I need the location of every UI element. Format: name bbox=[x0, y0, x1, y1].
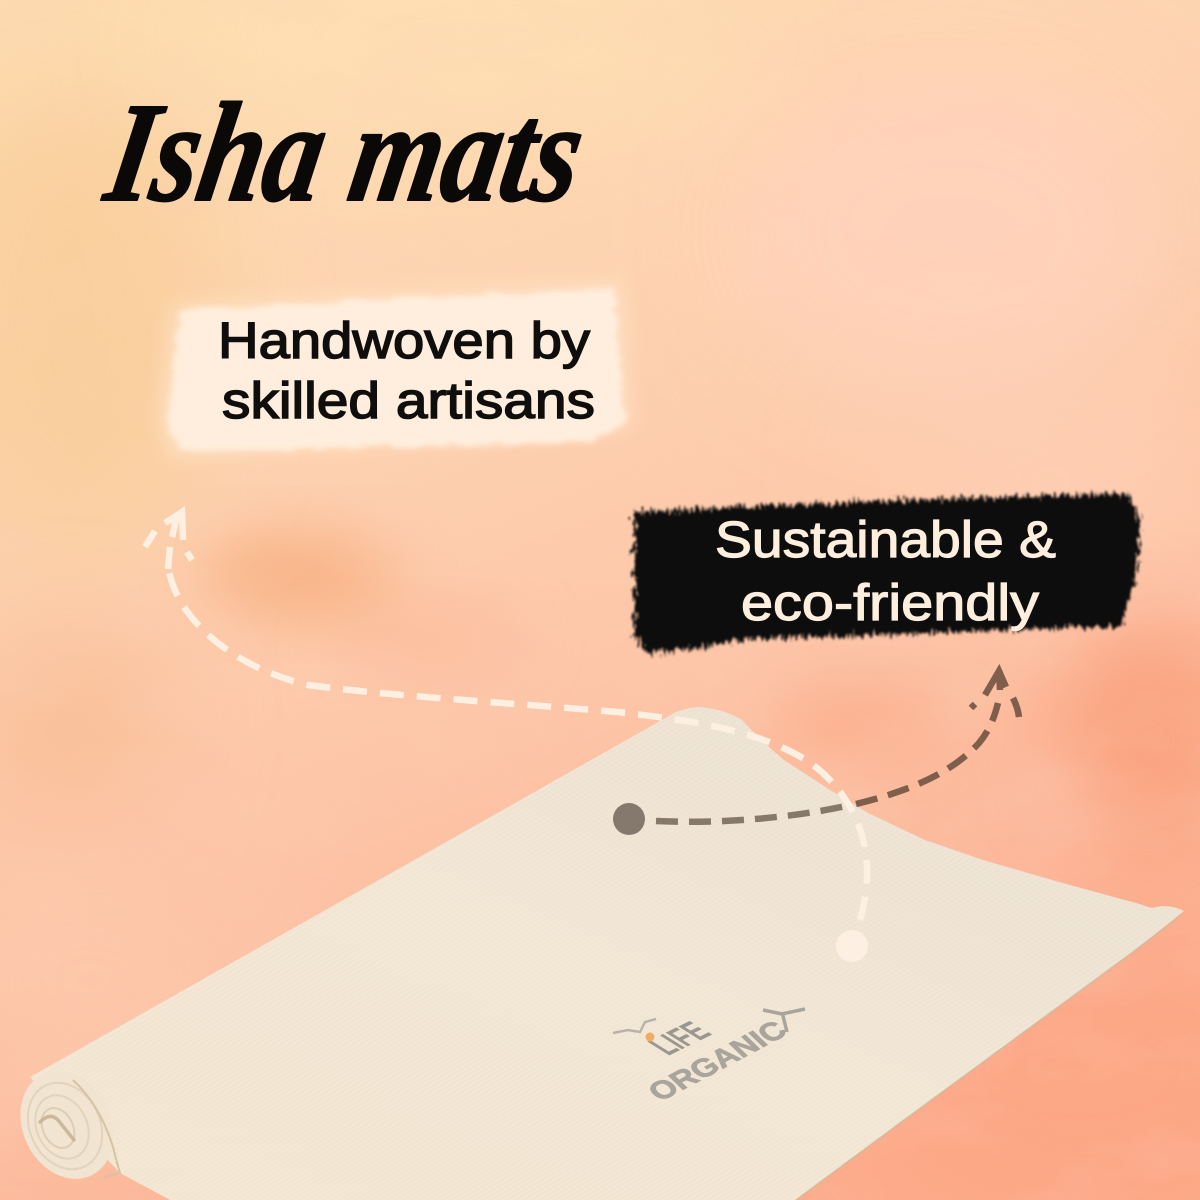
label: handwoven by skilled artisans bbox=[158, 280, 632, 458]
arrow head bbox=[971, 671, 1019, 717]
mat weave texture bbox=[30, 707, 1184, 1200]
title: Isha mats bbox=[95, 73, 595, 231]
mat right edge line bbox=[796, 916, 1180, 1200]
title: Isha mats: Isha bbox=[95, 73, 338, 231]
dashed curve bbox=[168, 565, 867, 920]
brush patch: cream bbox=[158, 280, 632, 458]
handwoven text: skilled artisans bbox=[222, 372, 595, 429]
arrow head bbox=[145, 512, 192, 560]
logo: life organic: ORGANIC bbox=[642, 1016, 794, 1107]
arrow shaft tip bbox=[168, 516, 177, 569]
sustainable text: Sustainable & bbox=[715, 511, 1056, 568]
dashed curve off mat bbox=[856, 703, 998, 804]
title: Isha mats: mats bbox=[340, 73, 595, 231]
logo: life organic: LIFE bbox=[640, 1016, 720, 1061]
handwoven text: Handwoven by bbox=[218, 312, 591, 369]
arrow: brown dashed to eco-friendly bbox=[656, 671, 1019, 822]
dot: brown marker bbox=[613, 803, 645, 835]
label: sustainable and eco-friendly bbox=[634, 494, 1140, 654]
logo: life organic bbox=[613, 1009, 805, 1107]
mat body bbox=[30, 707, 1184, 1200]
yoga mat bbox=[3, 707, 1184, 1200]
dot: cream marker bbox=[836, 930, 868, 962]
rolled end bbox=[3, 1055, 131, 1195]
sustainable text: eco-friendly bbox=[741, 574, 1040, 631]
dashed curve on mat bbox=[656, 806, 846, 822]
brush patch: black bbox=[634, 494, 1140, 654]
arrow: cream dashed to handwoven bbox=[145, 512, 867, 920]
